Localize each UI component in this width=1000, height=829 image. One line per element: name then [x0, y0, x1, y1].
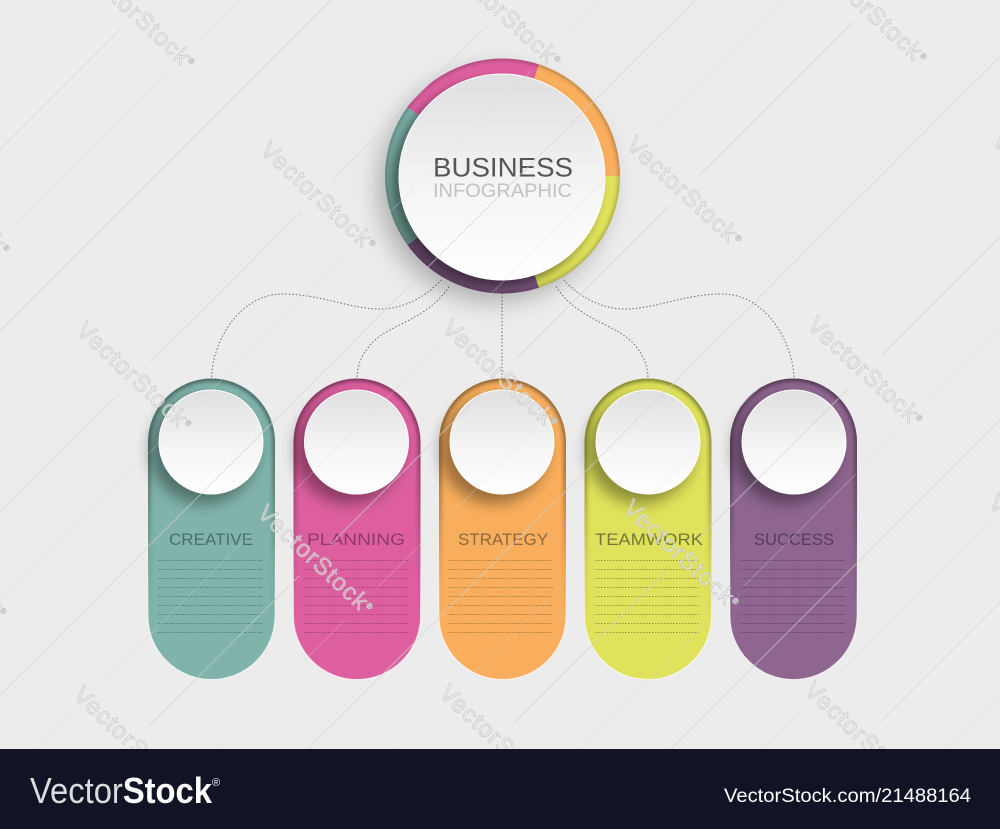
connector: planning: [357, 285, 450, 377]
connector: creative: [212, 280, 441, 377]
circle badge: [159, 390, 263, 494]
watermark pattern: ®: [918, 51, 929, 62]
label: TEAMWORK: [595, 530, 704, 549]
footer bar: [0, 749, 1000, 829]
connector: success: [564, 280, 794, 377]
watermark pattern: VectorStock: [71, 317, 192, 432]
label: SUCCESS: [754, 530, 834, 549]
panel: creative: [148, 378, 275, 680]
watermark pattern: VectorStock: [802, 312, 923, 427]
central disc: [398, 74, 606, 280]
circle shadow: [732, 396, 840, 504]
text lines: [449, 560, 554, 632]
panel: planning: [294, 378, 420, 680]
circle badge: [304, 390, 408, 494]
circle badge: [450, 390, 554, 494]
registered mark: ®: [212, 777, 220, 789]
watermark pattern: ®: [186, 56, 197, 67]
watermark pattern: VectorStock: [434, 680, 555, 795]
ring segment: lime: [502, 176, 620, 288]
watermark pattern: VectorStock: [68, 682, 189, 797]
text lines: [595, 560, 700, 632]
watermark pattern: ®: [364, 601, 375, 612]
text lines: [158, 560, 263, 632]
watermark pattern: ®: [733, 233, 744, 244]
watermark pattern: VectorStock: [255, 137, 376, 252]
subheading: infographic: INFOGRAPHIC: [433, 181, 572, 202]
watermark pattern: ®: [552, 54, 563, 65]
watermark pattern: ®: [730, 596, 741, 607]
circle badge: [596, 390, 700, 494]
footer url: VectorStock.com/21488164: [724, 786, 971, 807]
watermark pattern: VectorStock: [437, 315, 558, 430]
panel: strategy: [439, 378, 566, 680]
circle shadow: [294, 396, 402, 504]
watermark pattern: ®: [183, 418, 194, 429]
footer logo: VectorStock: [30, 770, 213, 811]
circle shadow: [440, 396, 548, 504]
watermark pattern: ®: [546, 781, 557, 792]
central ring: [385, 59, 620, 293]
ring segment: purple: [407, 176, 539, 293]
watermark pattern: ®: [549, 416, 560, 427]
ring segment: orange: [502, 64, 620, 176]
watermark pattern: ®: [367, 238, 378, 249]
label: PLANNING: [307, 530, 405, 549]
text lines: [741, 560, 846, 632]
circle badge: [742, 390, 846, 494]
panel: success: [730, 378, 857, 680]
watermark pattern: VectorStock: [799, 677, 920, 792]
ring depth shading: [384, 58, 620, 294]
heading: business: BUSINESS: [433, 152, 573, 182]
connector: strategy: [501, 293, 503, 378]
watermark pattern: VectorStock: [621, 132, 742, 247]
watermark pattern: VectorStock: [252, 500, 373, 615]
panel: teamwork: [584, 378, 712, 680]
circle shadow: [586, 396, 694, 504]
circle shadow: [149, 396, 257, 504]
watermark pattern: ®: [1, 243, 12, 254]
watermark pattern: ®: [180, 783, 191, 794]
ring segment: teal: [385, 107, 502, 245]
ring segment: pink: [407, 59, 539, 176]
watermark pattern: ®: [914, 413, 925, 424]
label: STRATEGY: [458, 530, 548, 549]
connector: teamwork: [555, 285, 648, 377]
watermark pattern: VectorStock: [618, 495, 739, 610]
label: CREATIVE: [169, 530, 253, 549]
watermark pattern: ®: [911, 778, 922, 789]
central ring shadow: [378, 70, 610, 302]
text lines: [304, 560, 409, 632]
